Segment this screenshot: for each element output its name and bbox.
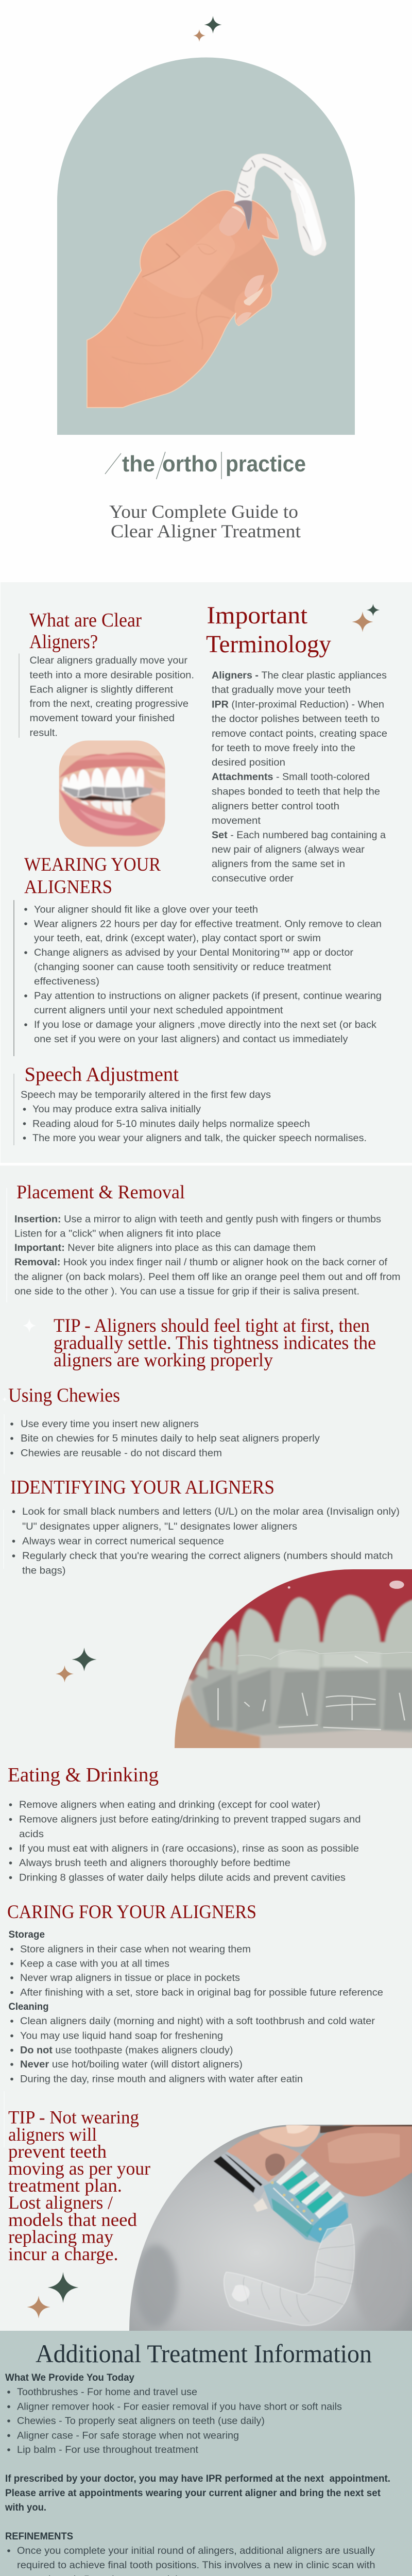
bullet list: Change aligners as advised by your Dental Monitoring™ app or doctor	[34, 947, 354, 958]
list: refinements: REFINEMENTS	[5, 2531, 73, 2542]
text block: storage and cleaning: Storage	[8, 1929, 45, 1940]
callout: tip aligners tight: TIP - Aligners should feel tight at first, then	[54, 1315, 370, 1336]
bullet list	[9, 1800, 360, 1883]
text block: storage and cleaning: After finishing with a set, store back in original bag for possible future reference	[20, 1988, 383, 1998]
heading: Important	[207, 602, 308, 629]
list: refinements: required to achieve final tooth positions. This involves a new in clinic scan with	[17, 2560, 375, 2571]
panel: cover	[57, 16, 355, 541]
bullet list: acids	[19, 1829, 44, 1840]
title: Your Complete Guide to	[109, 501, 298, 522]
heading: IDENTIFYING YOUR ALIGNERS	[10, 1477, 274, 1498]
lower teeth	[81, 801, 131, 815]
text block: definitions: aligners better control tooth	[212, 801, 339, 812]
bullet list: Always wear in correct numerical sequence	[22, 1536, 224, 1547]
text block: Each aligner is slightly different	[30, 684, 174, 695]
callout: tip not wearing aligners	[4, 2091, 150, 2318]
text block: storage and cleaning: Never use hot/boiling water (will distort aligners)	[20, 2059, 243, 2070]
logo: the ortho practice: ortho	[162, 451, 217, 477]
photo: hand holding clear aligner	[87, 154, 326, 408]
bullet list: Your aligner should fit like a glove over your teeth	[34, 904, 258, 915]
callout: tip not wearing aligners: prevent teeth	[8, 2141, 107, 2162]
heading	[29, 609, 142, 653]
text block: definitions: aligners from the same set in	[212, 859, 345, 870]
heading: Using Chewies	[8, 1385, 120, 1406]
panel: what are clear aligners	[19, 609, 194, 850]
list: refinements	[5, 2531, 400, 2576]
text block: storage and cleaning: Do not use toothpaste (makes aligners cloudy)	[20, 2045, 233, 2056]
icon: sparkle stars	[193, 16, 221, 42]
text block: result.	[30, 727, 58, 739]
bullet list: Wear aligners 22 hours per day for effective treatment. Only remove to clean	[34, 919, 382, 929]
text block: definitions: Set - Each numbered bag containing a	[212, 830, 386, 841]
bullet list: Pay attention to instructions on aligner packets (if present, continue wearing	[34, 991, 382, 1002]
notice: IPR and appointments: with you.	[5, 2502, 46, 2513]
heading: CARING FOR YOUR ALIGNERS	[7, 1902, 256, 1923]
text block: storage and cleaning: Keep a case with you at all times	[20, 1959, 169, 1970]
panel: placement and removal	[7, 1182, 401, 1302]
callout: tip not wearing aligners: replacing may	[8, 2227, 113, 2247]
bullet list	[10, 1419, 320, 1459]
heading: Additional Treatment Information	[36, 2339, 372, 2368]
callout: tip aligners tight	[23, 1315, 376, 1371]
notice: IPR and appointments: If prescribed by your doctor, you may have IPR performed at the next appointment.	[5, 2473, 390, 2484]
logo: the ortho practice: practice	[226, 451, 306, 477]
arch background	[57, 58, 355, 435]
text block: storage and cleaning: During the day, rinse mouth and aligners with water after eatin	[20, 2074, 303, 2084]
fingers	[145, 771, 165, 789]
text block: storage and cleaning	[8, 1929, 383, 2084]
text block: definitions: Attachments - Small tooth-colored	[212, 772, 370, 783]
text block: Reading aloud for 5-10 minutes daily helps normalize speech	[32, 1119, 310, 1129]
text block	[30, 655, 194, 739]
callout: tip not wearing aligners: treatment plan.	[8, 2175, 122, 2196]
text block: definitions: IPR (Inter-proximal Reduction) - When	[212, 699, 384, 710]
list: what we provide: Aligner remover hook - For easier removal if you have short or soft nails	[17, 2401, 342, 2412]
text block: definitions: that gradually move your teeth	[212, 685, 351, 696]
icon: sparkle stars	[27, 2272, 78, 2318]
list: what we provide: Aligner case - For safe storage when not wearing	[17, 2430, 239, 2441]
text block: storage and cleaning: Store aligners in their case when not wearing them	[20, 1944, 251, 1955]
text block: definitions	[212, 670, 387, 884]
handle	[214, 2151, 270, 2200]
upper teeth	[62, 767, 144, 793]
photo: smile with aligner	[59, 740, 165, 847]
panel: using chewies	[2, 1385, 320, 1474]
text block: Listen for a "click" when aligners fit into place	[14, 1228, 221, 1240]
photo: toothbrush cleaning aligner	[129, 2124, 412, 2332]
middle finger nail	[266, 217, 279, 239]
panel: identifying your aligners	[4, 1477, 412, 1752]
text block: The more you wear your aligners and talk, the quicker speech normalises.	[32, 1133, 367, 1144]
panel: instructions background	[0, 1165, 412, 2331]
heading	[206, 602, 331, 658]
bullet list: If you lose or damage your aligners ,move directly into the next set (or back	[34, 1020, 377, 1030]
bullet list: Regularly check that you're wearing the correct aligners (numbers should match	[22, 1551, 393, 1562]
bullet list: If you must eat with aligners in (rare occasions), rinse as soon as possible	[19, 1843, 359, 1854]
icon: white star	[23, 1318, 36, 1333]
bullet list: current aligners until your next scheduled appointment	[34, 1005, 283, 1016]
text block: teeth into a more desirable position.	[30, 670, 194, 681]
panel: caring for your aligners	[7, 1902, 383, 2084]
bullet list: (changing sooner can cause tooth sensitivity or reduce treatment	[34, 962, 332, 973]
bullet list: Always brush teeth and aligners thoroughly before bedtime	[19, 1858, 290, 1869]
text block: definitions: consecutive order	[212, 873, 294, 884]
bullet list: your teeth, eat, drink (except water), play contact sport or swim	[34, 933, 321, 944]
bullet list	[12, 1506, 400, 1577]
notice: IPR and appointments	[5, 2473, 390, 2513]
logo: the ortho practice: the	[122, 451, 155, 477]
list: what we provide	[5, 2372, 342, 2455]
text block: definitions: for teeth to move freely into the	[212, 743, 355, 754]
text block: Clear aligners gradually move your	[30, 655, 188, 666]
text block	[21, 1090, 367, 1144]
heading: Speech Adjustment	[25, 1063, 179, 1086]
callout: tip not wearing aligners: moving as per your	[8, 2158, 150, 2179]
callout: tip aligners tight: aligners are working properly	[54, 1350, 273, 1371]
heading: ALIGNERS	[24, 877, 112, 897]
text block: storage and cleaning: Clean aligners daily (morning and night) with a soft toothbrush and cold water	[20, 2016, 375, 2027]
text block: storage and cleaning: Cleaning	[8, 2002, 48, 2012]
bullet list: effectiveness)	[34, 976, 99, 987]
text block: definitions: Aligners - The clear plastic appliances	[212, 670, 387, 681]
bullet list: Remove aligners when eating and drinking (except for cool water)	[19, 1800, 320, 1810]
callout: tip not wearing aligners: Lost aligners /	[8, 2192, 113, 2213]
panel: intro background	[1, 582, 412, 1163]
fingers	[226, 2133, 300, 2183]
title	[109, 501, 301, 541]
list: what we provide: Chewies - To properly seat aligners on teeth (use daily)	[17, 2416, 265, 2427]
callout: tip not wearing aligners: aligners will	[8, 2124, 97, 2145]
bullet list: Bite on chewies for 5 minutes daily to help seat aligners properly	[21, 1433, 320, 1444]
text block: definitions: remove contact points, creating space	[212, 728, 387, 739]
bristle head	[263, 2180, 348, 2243]
text block: the aligner (on back molars). Peel them off like an orange peel them out and off from	[14, 1272, 401, 1283]
list: what we provide: What We Provide You Today	[5, 2372, 134, 2383]
list: what we provide: Lip balm - For use throughout treatment	[17, 2445, 199, 2455]
panel: wearing your aligners	[14, 854, 382, 1056]
text block: movement toward your finished	[30, 713, 175, 724]
text block: definitions: shapes bonded to teeth that help the	[212, 786, 380, 798]
bullet list: the bags)	[22, 1565, 66, 1577]
text block: Insertion: Use a mirror to align with teeth and gently push with fingers or thumbs	[14, 1214, 381, 1225]
heading: Eating & Drinking	[8, 1764, 159, 1786]
heading: What are Clear	[29, 609, 142, 631]
text block: definitions: the doctor polishes between teeth to	[212, 714, 380, 725]
text block: Important: Never bite aligners into place as this can damage them	[14, 1243, 316, 1253]
text block: Speech may be temporarily altered in the first few days	[21, 1090, 271, 1100]
list: what we provide: Toothbrushes - For home and travel use	[17, 2387, 197, 2398]
notice: IPR and appointments: Please arrive at appointments wearing your current aligner and bring the next set	[5, 2488, 381, 2499]
text block: definitions: desired position	[212, 757, 285, 768]
bullet list: Remove aligners just before eating/drinking to prevent trapped sugars and	[19, 1815, 360, 1825]
logo: the ortho practice	[105, 451, 306, 479]
panel: additional treatment information	[0, 2331, 412, 2576]
aligner	[234, 154, 326, 256]
callout: tip not wearing aligners: incur a charge.	[8, 2244, 118, 2264]
panel: important terminology	[206, 602, 387, 884]
text block: definitions: new pair of aligners (always wear	[212, 844, 365, 855]
heading	[24, 854, 161, 897]
bullet list: Chewies are reusable - do not discard them	[21, 1448, 222, 1459]
thumb nail	[219, 206, 245, 236]
callout: tip aligners tight: gradually settle. This tightness indicates the	[54, 1332, 376, 1353]
text block: storage and cleaning: You may use liquid hand soap for freshening	[20, 2031, 223, 2041]
bullet list: "U" designates upper aligners, "L" designates lower aligners	[22, 1521, 297, 1532]
lower nails	[245, 275, 264, 299]
heading: Placement & Removal	[16, 1182, 185, 1203]
heading: Aligners?	[29, 631, 98, 653]
text block: You may produce extra saliva initially	[32, 1104, 201, 1115]
panel: speech adjustment	[14, 1063, 367, 1145]
text block: Removal: Hook you index finger nail / thumb or aligner hook on the back corner of	[14, 1257, 388, 1268]
bullet list: Look for small black numbers and letters (U/L) on the molar area (Invisalign only)	[22, 1506, 400, 1517]
heading: Terminology	[206, 631, 331, 658]
title: Clear Aligner Treatment	[111, 521, 301, 541]
text block: definitions: movement	[212, 816, 261, 826]
callout: tip not wearing aligners: TIP - Not wearing	[8, 2107, 139, 2128]
icon: sparkle stars	[56, 1648, 97, 1683]
aligner	[224, 2224, 354, 2326]
panel: eating and drinking	[8, 1764, 360, 1883]
photo: close-up of teeth with clear aligner	[168, 1564, 412, 1752]
list: refinements: Once you complete your initial round of alingers, additional aligners are usually	[17, 2546, 375, 2556]
text block: from the next, creating progressive	[30, 699, 188, 709]
bullet list: Drinking 8 glasses of water daily helps dilute acids and prevent cavities	[19, 1872, 346, 1883]
text block: one side to the other ). You can use a tissue for grip if their is saliva present.	[14, 1286, 359, 1297]
icon: sparkle stars	[352, 604, 380, 632]
bullet list: one set if you were on your last aligners) and contact us immediately	[34, 1034, 348, 1045]
text block	[14, 1214, 401, 1297]
aligner band	[63, 787, 153, 798]
bullet list: Use every time you insert new aligners	[21, 1419, 199, 1430]
callout: tip not wearing aligners: models that need	[8, 2210, 137, 2230]
text block: storage and cleaning: Never wrap aligners in tissue or place in pockets	[20, 1973, 240, 1984]
heading: WEARING YOUR	[24, 854, 161, 875]
bullet list	[24, 904, 382, 1045]
